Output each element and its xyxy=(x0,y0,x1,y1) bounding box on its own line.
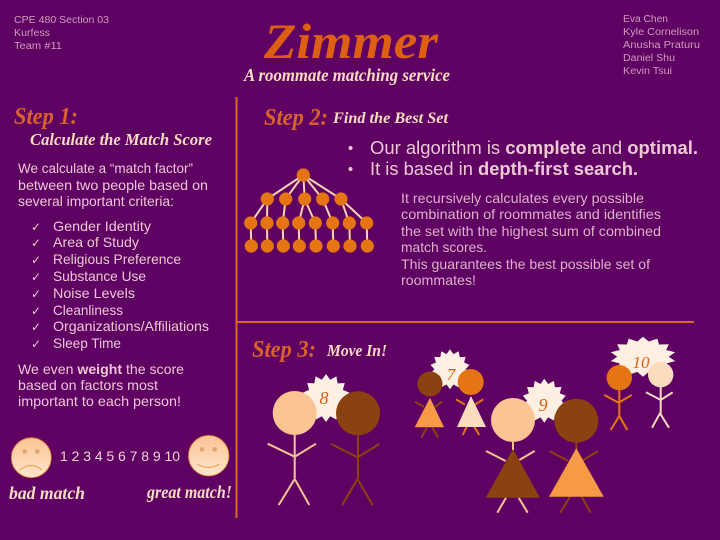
criteria checklist: Organizations/Affiliations xyxy=(53,318,209,334)
weight note: based on factors most xyxy=(18,377,158,393)
team members: Kyle Cornelison xyxy=(623,27,699,38)
team members xyxy=(623,14,700,77)
algorithm description: It recursively calculates every possible xyxy=(401,190,644,206)
intro text: We calculate a “match factor” xyxy=(18,160,193,176)
criteria checklist: ✓ xyxy=(31,236,41,250)
criteria checklist: ✓ xyxy=(31,320,41,334)
score scale: 1 2 3 4 5 6 7 8 9 10 xyxy=(60,448,180,464)
weight note: important to each person! xyxy=(18,393,181,409)
match burst 8 xyxy=(303,374,349,422)
course info: Kurfess xyxy=(14,28,50,39)
panel: step 1 xyxy=(9,104,232,503)
criteria checklist: ✓ xyxy=(31,337,41,351)
step 3 heading: Step 3: xyxy=(252,337,316,363)
search tree diagram xyxy=(244,168,374,253)
match burst 10 xyxy=(611,337,675,377)
algorithm description: combination of roommates and identifies xyxy=(401,206,661,222)
match burst 10: 10 xyxy=(632,353,650,372)
algorithm bullets: Our algorithm is complete and optimal. xyxy=(370,138,698,158)
figure: pair 8 left xyxy=(268,391,317,505)
weight note xyxy=(18,361,184,409)
match burst 9 xyxy=(523,379,566,423)
weight note: We even weight the score xyxy=(18,361,184,377)
criteria checklist: ✓ xyxy=(31,253,41,267)
figure: pair 7 left xyxy=(415,372,444,438)
label: great match: great match! xyxy=(146,482,232,502)
match burst 7: 7 xyxy=(447,365,457,384)
figure: pair 7 right xyxy=(456,369,486,435)
criteria checklist: ✓ xyxy=(31,220,41,234)
algorithm description: match scores. xyxy=(401,239,487,255)
algorithm bullets: It is based in depth-first search. xyxy=(370,159,638,179)
course info: Team #11 xyxy=(14,41,62,52)
team members: Kevin Tsui xyxy=(623,66,672,77)
figure: pair 9 right xyxy=(549,399,604,513)
intro text: between two people based on xyxy=(18,177,208,193)
match burst 7 xyxy=(430,349,470,389)
criteria checklist: Religious Preference xyxy=(53,251,181,267)
algorithm description xyxy=(401,190,661,288)
criteria checklist: Noise Levels xyxy=(53,285,135,301)
horizontal divider xyxy=(237,321,694,323)
team members: Daniel Shu xyxy=(623,53,675,64)
step 2 heading: Step 2: xyxy=(264,105,328,131)
course info xyxy=(14,15,109,52)
figure: pair 9 left xyxy=(486,398,540,513)
figure: pair 10 left xyxy=(604,365,632,430)
criteria checklist: Area of Study xyxy=(53,234,139,250)
criteria checklist: Sleep Time xyxy=(53,335,121,351)
vertical divider xyxy=(236,97,238,518)
panel: step 3 xyxy=(252,337,675,513)
match burst 8: 8 xyxy=(320,388,328,408)
subtitle: A roommate matching service xyxy=(243,65,450,85)
step 1 subheading: Calculate the Match Score xyxy=(30,130,212,149)
team members: Eva Chen xyxy=(623,14,668,25)
algorithm description: roommates! xyxy=(401,272,476,288)
step 3 subheading: Move In! xyxy=(326,341,387,360)
figure: pair 10 right xyxy=(646,362,673,428)
step 1 heading: Step 1: xyxy=(14,104,78,130)
step 2 subheading: Find the Best Set xyxy=(332,110,449,127)
criteria checklist xyxy=(31,218,209,351)
intro text: several important criteria: xyxy=(18,193,174,209)
criteria checklist: ✓ xyxy=(31,304,41,318)
criteria checklist: Gender Identity xyxy=(53,218,151,234)
criteria checklist: ✓ xyxy=(31,287,41,301)
criteria checklist: Substance Use xyxy=(53,268,146,284)
algorithm description: the set with the highest sum of combined xyxy=(401,223,661,239)
course info: CPE 480 Section 03 xyxy=(14,15,109,26)
figure: pair 8 right xyxy=(331,391,380,505)
algorithm bullets xyxy=(348,138,698,179)
match burst 9: 9 xyxy=(538,395,548,415)
criteria checklist: Cleanliness xyxy=(53,302,123,318)
label: bad match: bad match xyxy=(9,483,85,503)
team members: Anusha Praturu xyxy=(623,40,700,51)
icon: happy face xyxy=(188,435,229,476)
algorithm description: This guarantees the best possible set of xyxy=(401,256,650,272)
panel: step 2 xyxy=(244,105,698,288)
intro text xyxy=(18,160,208,209)
title: Zimmer xyxy=(263,13,439,69)
criteria checklist: ✓ xyxy=(31,270,41,284)
icon: sad face xyxy=(11,438,51,478)
